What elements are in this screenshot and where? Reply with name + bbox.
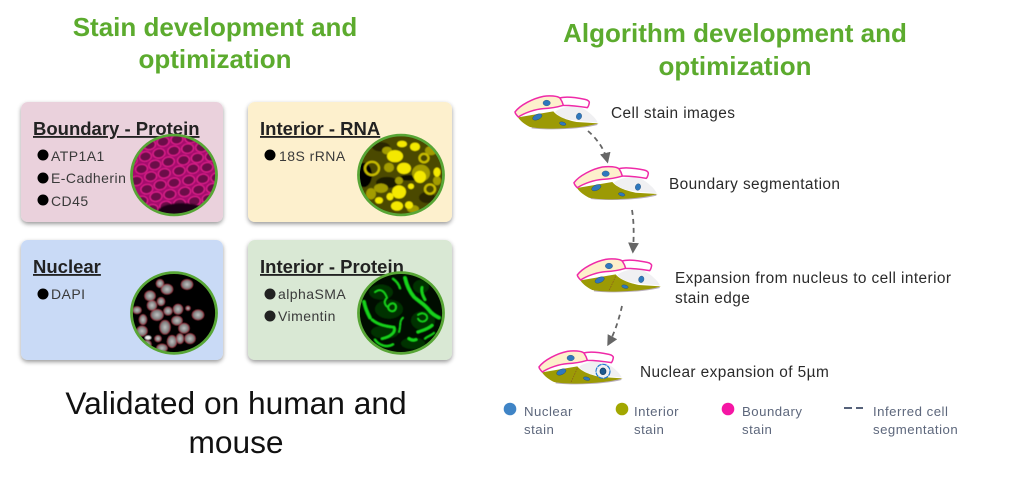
legend item: nuclear stain: Nuclear xyxy=(524,404,573,419)
heading: interior protein: Interior - Protein xyxy=(260,256,404,277)
label: cell stain images: Cell stain images xyxy=(611,105,735,122)
legend item: inferred cell segmentation: segmentation xyxy=(873,422,958,437)
step 1: cell stain images xyxy=(515,96,735,129)
panel: interior RNA xyxy=(248,102,452,222)
icon: expansion from nucleus xyxy=(577,259,661,292)
card background: nuclear xyxy=(21,240,223,360)
arrow: step 3 to step 4 xyxy=(609,306,622,343)
marker list: interior RNA: 18S rRNA xyxy=(279,148,346,164)
step 2: boundary segmentation xyxy=(574,167,840,199)
marker list: nuclear: DAPI xyxy=(51,286,85,302)
micrograph: green protein stain xyxy=(357,271,445,355)
heading: algorithm development xyxy=(563,18,907,81)
micrograph: magenta membrane stain xyxy=(130,134,218,216)
marker list: boundary protein xyxy=(38,148,126,209)
arrow: step 2 to step 3 xyxy=(632,210,634,250)
step 3: expansion from nucleus xyxy=(577,259,951,307)
icon: boundary segmentation xyxy=(574,167,658,199)
label: expansion from nucleus xyxy=(675,270,951,307)
marker list: interior protein xyxy=(264,286,346,324)
heading: boundary protein: Boundary - Protein xyxy=(33,118,200,139)
micrograph: grey nuclei stain xyxy=(130,271,218,355)
legend item: interior stain xyxy=(616,403,679,437)
heading: algorithm development: optimization xyxy=(658,51,812,81)
marker list: boundary protein: E-Cadherin xyxy=(51,170,126,186)
legend item: boundary stain: Boundary xyxy=(742,404,802,419)
label: nuclear expansion: Nuclear expansion of 5µm xyxy=(640,364,829,381)
legend item: interior stain: stain xyxy=(634,422,664,437)
text: validation statement: mouse xyxy=(188,424,284,460)
legend item: inferred cell segmentation: Inferred cell xyxy=(873,404,948,419)
panel: interior protein xyxy=(248,240,452,360)
arrow: step 1 to step 2 xyxy=(588,131,607,160)
marker list: interior protein: Vimentin xyxy=(278,308,336,324)
card background: interior RNA xyxy=(248,102,452,222)
heading: nuclear: Nuclear xyxy=(33,256,101,277)
legend item: boundary stain: stain xyxy=(742,422,772,437)
icon: cell stain images xyxy=(515,96,599,129)
card background: boundary protein xyxy=(21,102,223,222)
marker list: boundary protein: ATP1A1 xyxy=(51,148,105,164)
step 4: nuclear expansion xyxy=(539,351,829,384)
legend item: boundary stain xyxy=(722,403,802,437)
heading: stain development: Stain development and xyxy=(73,12,357,42)
text: validation statement xyxy=(65,385,407,460)
heading: stain development: optimization xyxy=(138,44,292,74)
heading: stain development xyxy=(73,12,357,74)
heading: interior RNA: Interior - RNA xyxy=(260,118,380,139)
legend item: nuclear stain: stain xyxy=(524,422,554,437)
legend item: nuclear stain xyxy=(504,403,573,437)
legend item: inferred cell segmentation xyxy=(844,404,958,437)
legend xyxy=(504,403,958,437)
legend item: interior stain: Interior xyxy=(634,404,679,419)
marker list: interior protein: alphaSMA xyxy=(278,286,346,302)
label: expansion from nucleus: Expansion from nucleus to cell interior xyxy=(675,270,951,287)
panel: nuclear xyxy=(21,240,223,360)
text: validation statement: Validated on human and xyxy=(65,385,407,421)
panel: boundary protein xyxy=(21,102,231,229)
label: expansion from nucleus: stain edge xyxy=(675,290,750,307)
marker list: boundary protein: CD45 xyxy=(51,193,89,209)
card background: interior protein xyxy=(248,240,452,360)
heading: algorithm development: Algorithm development and xyxy=(563,18,907,48)
label: boundary segmentation: Boundary segmentation xyxy=(669,176,840,193)
micrograph: yellow RNA stain xyxy=(356,134,445,216)
icon: nuclear expansion xyxy=(539,351,623,384)
